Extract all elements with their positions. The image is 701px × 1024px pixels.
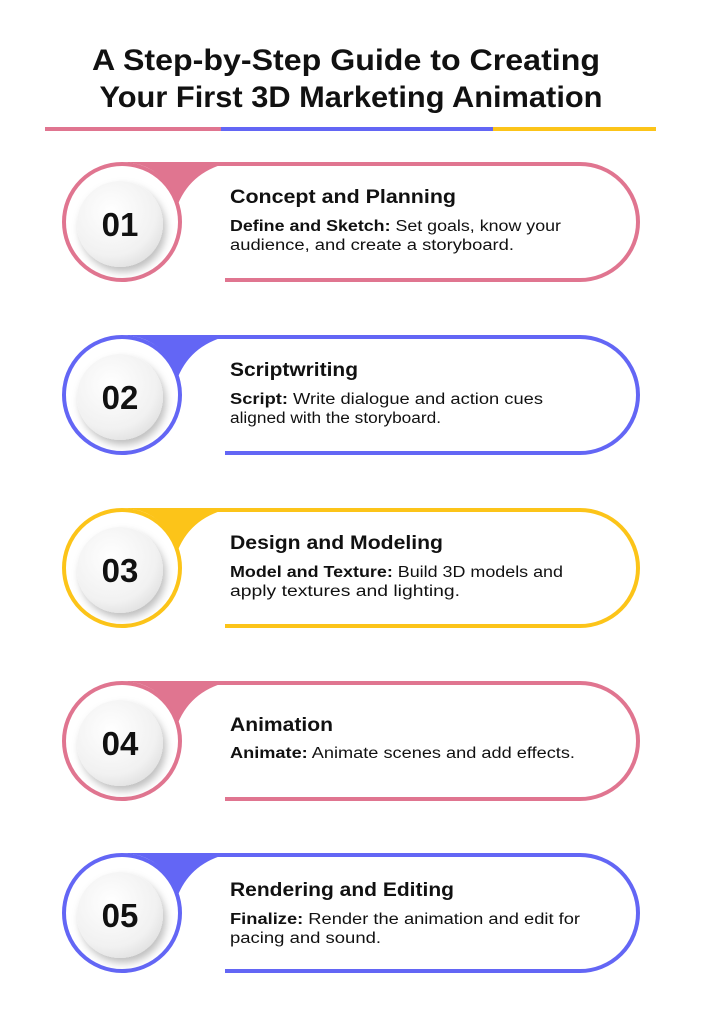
number badge: 02 <box>102 379 138 416</box>
number badge <box>77 527 163 613</box>
outline <box>64 683 638 799</box>
outline <box>64 164 638 280</box>
heading: Animation <box>230 714 333 736</box>
step 04 <box>64 681 638 799</box>
title: Your First 3D Marketing Animation <box>100 81 602 114</box>
step 05 <box>64 853 638 971</box>
body: Finalize: Render the animation and edit for <box>230 911 580 928</box>
number badge <box>77 700 163 786</box>
body: pacing and sound. <box>230 930 381 947</box>
outline <box>64 855 638 971</box>
body <box>230 564 563 600</box>
number badge <box>77 181 163 267</box>
outline <box>64 337 638 453</box>
body <box>230 218 561 254</box>
title <box>92 44 602 114</box>
number badge <box>77 354 163 440</box>
wedge <box>122 508 232 550</box>
body: Script: Write dialogue and action cues <box>230 391 543 408</box>
step 03 <box>64 508 638 626</box>
number badge: 05 <box>102 897 138 934</box>
heading: Rendering and Editing <box>230 879 454 901</box>
step 01 <box>64 162 638 280</box>
body: apply textures and lighting. <box>230 583 460 600</box>
outline <box>64 510 638 626</box>
number badge <box>77 872 163 958</box>
step 02 <box>64 335 638 453</box>
heading: Design and Modeling <box>230 532 443 554</box>
number badge: 04 <box>102 725 139 762</box>
heading: Scriptwriting <box>230 359 358 381</box>
wedge <box>122 681 232 723</box>
body: audience, and create a storyboard. <box>230 237 514 254</box>
body: Define and Sketch: Set goals, know your <box>230 218 561 235</box>
number badge: 03 <box>102 552 138 589</box>
title: A Step-by-Step Guide to Creating <box>92 44 600 77</box>
body <box>230 911 580 947</box>
body: Animate: Animate scenes and add effects. <box>230 745 575 762</box>
wedge <box>122 335 232 377</box>
wedge <box>122 162 232 204</box>
body <box>230 391 543 427</box>
wedge <box>122 853 232 895</box>
body: Model and Texture: Build 3D models and <box>230 564 563 581</box>
number badge: 01 <box>102 206 138 243</box>
body: aligned with the storyboard. <box>230 410 441 427</box>
title underline <box>45 127 656 131</box>
heading: Concept and Planning <box>230 186 456 208</box>
